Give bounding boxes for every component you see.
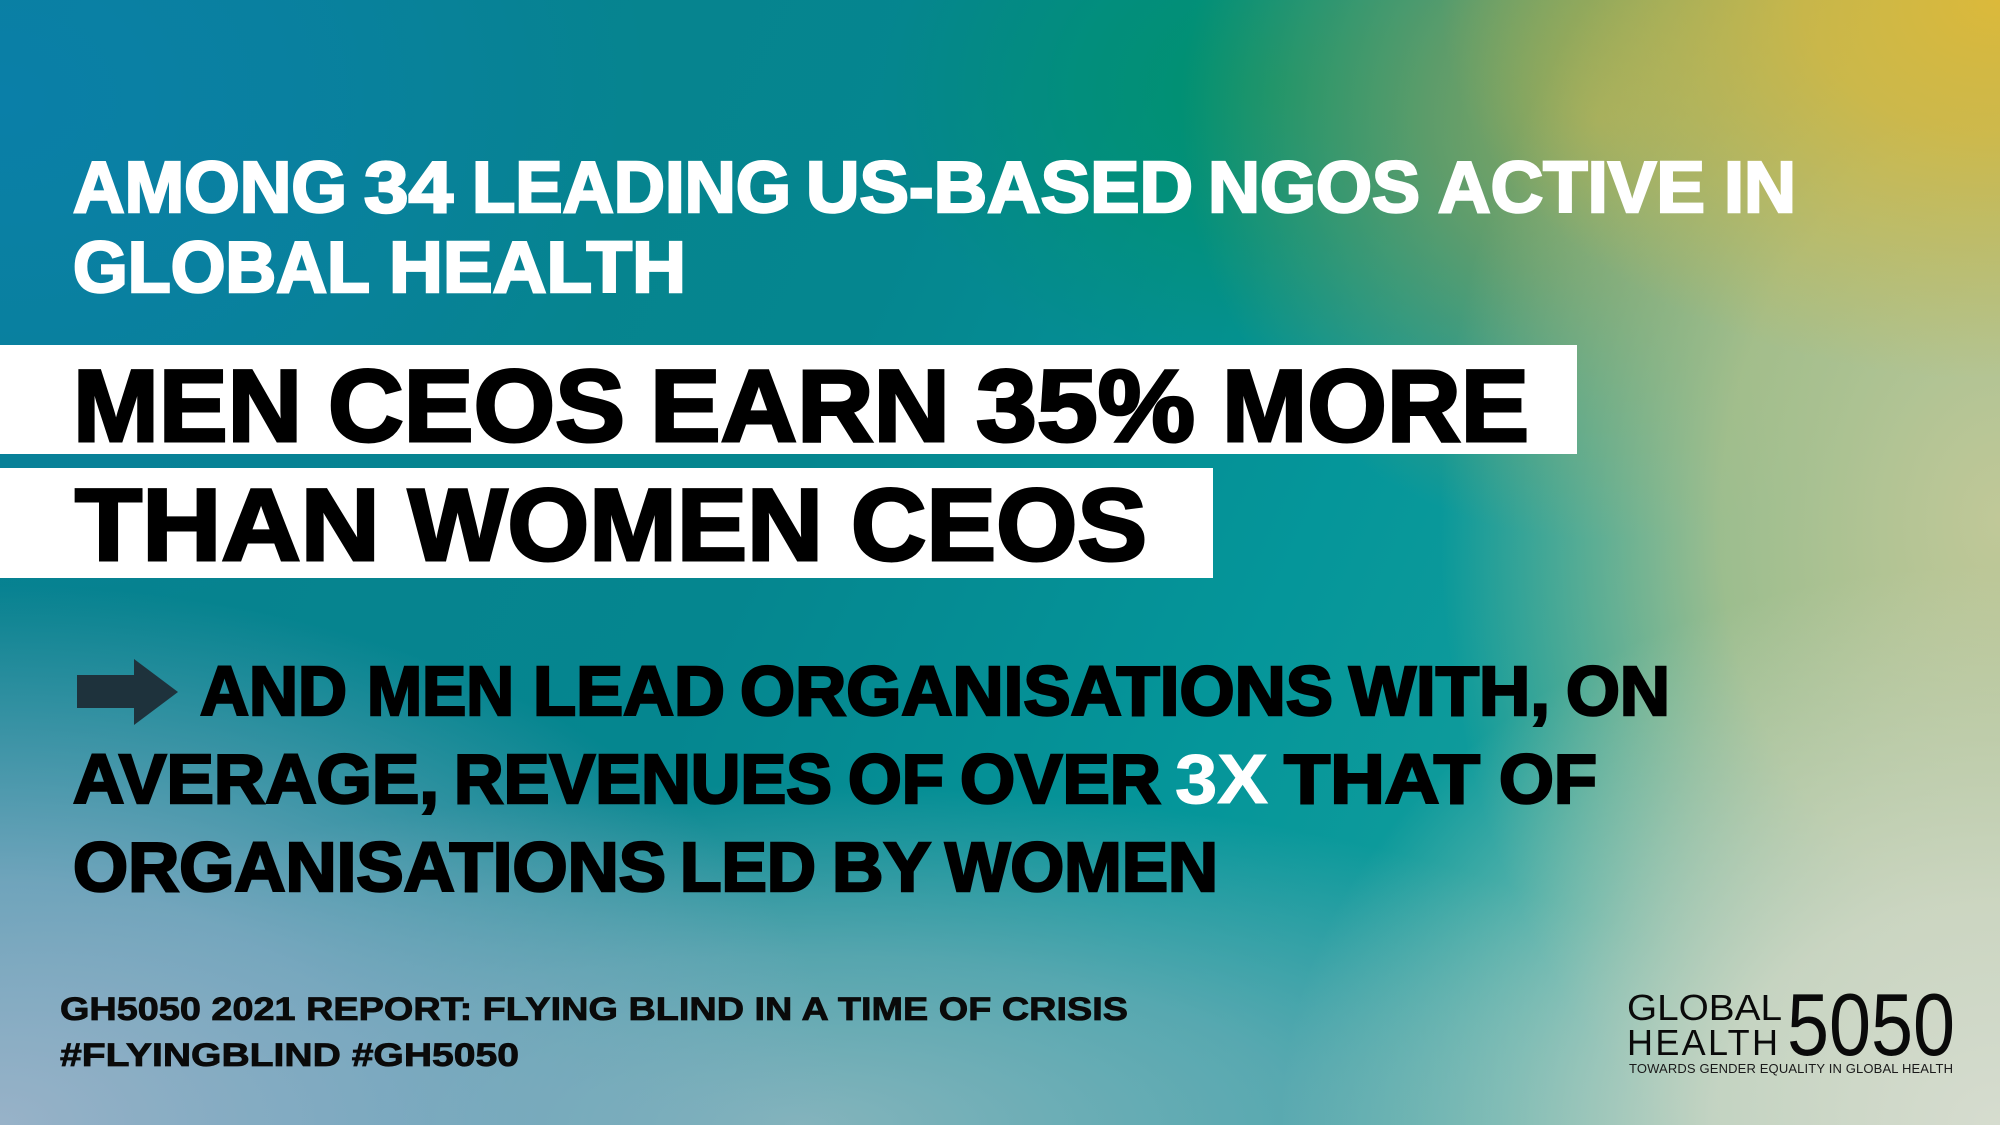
heading: NGOS xyxy=(1208,148,1420,228)
body statement: ORGANISATIONS xyxy=(73,828,666,906)
body statement: THAT xyxy=(1284,740,1480,818)
icon: arrow xyxy=(77,659,178,725)
source and hashtags: #FLYINGBLIND #GH5050 xyxy=(60,1037,519,1073)
body statement: OVER xyxy=(960,740,1161,818)
highlighted headline xyxy=(0,345,1577,582)
highlighted headline: EARN xyxy=(650,349,950,463)
body statement: REVENUES xyxy=(454,740,832,818)
body statement: OF xyxy=(848,740,944,818)
heading: IN xyxy=(1724,148,1796,228)
body statement: WOMEN xyxy=(945,828,1218,906)
heading: AMONG xyxy=(73,148,347,228)
body statement: LEAD xyxy=(533,652,725,730)
logo: Global Health 5050 xyxy=(1627,975,1955,1076)
body statement: AND xyxy=(200,652,347,730)
body statement: MEN xyxy=(367,652,514,730)
highlighted headline: CEOS xyxy=(851,468,1147,582)
highlighted headline: MORE xyxy=(1222,349,1529,463)
body statement xyxy=(73,652,1670,906)
highlighted headline: CEOS xyxy=(328,349,625,463)
heading: US-BASED xyxy=(806,148,1193,228)
body statement: ORGANISATIONS xyxy=(740,652,1333,730)
highlighted headline: MEN xyxy=(73,349,302,463)
heading: 34 xyxy=(364,148,453,228)
body statement: AVERAGE, xyxy=(73,740,439,818)
logo: Global Health 5050: GLOBAL xyxy=(1627,987,1782,1028)
body statement: 3X xyxy=(1175,740,1268,818)
source and hashtags xyxy=(60,991,1128,1073)
heading: HEALTH xyxy=(389,228,686,308)
body statement: ON xyxy=(1566,652,1670,730)
source and hashtags: GH5050 2021 REPORT: FLYING BLIND IN A TIME OF CRISIS xyxy=(60,991,1128,1027)
body statement: OF xyxy=(1499,740,1597,818)
logo: Global Health 5050: 5050 xyxy=(1787,975,1955,1074)
logo: Global Health 5050: TOWARDS GENDER EQUALITY IN GLOBAL HEALTH xyxy=(1629,1061,1953,1076)
logo: Global Health 5050: HEALTH xyxy=(1627,1022,1778,1063)
heading: LEADING xyxy=(472,148,791,228)
highlighted headline: 35% xyxy=(976,349,1195,463)
body statement: WITH, xyxy=(1349,652,1550,730)
body statement: LED xyxy=(680,828,816,906)
highlighted headline: THAN xyxy=(75,468,380,582)
body statement: BY xyxy=(832,828,931,906)
heading xyxy=(73,148,1796,308)
highlighted headline: WOMEN xyxy=(408,468,823,582)
heading: ACTIVE xyxy=(1438,148,1705,228)
heading: GLOBAL xyxy=(73,228,370,308)
